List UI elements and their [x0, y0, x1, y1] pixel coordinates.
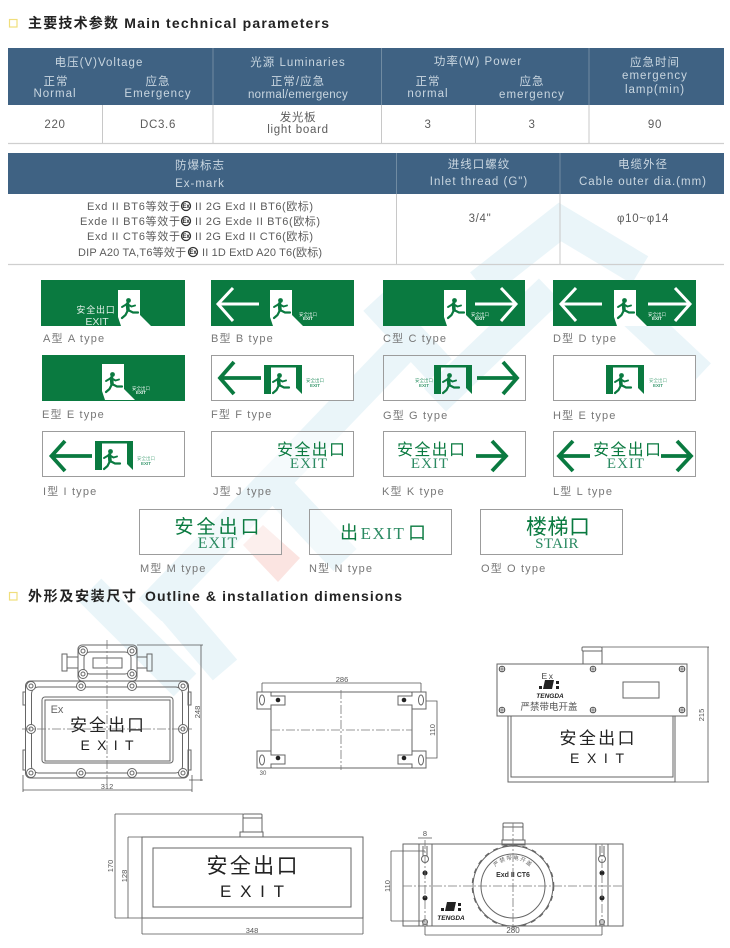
table: explosion-proof parameters: Exd II BT6等效于: [87, 199, 180, 213]
sign: type L: 安全出口: [593, 441, 661, 459]
table: explosion-proof parameters: Exd II CT6等效于: [87, 229, 180, 243]
drawing: side view with terminal cover: 安全出口: [560, 729, 634, 748]
drawing: rear view with round cover: TENGDA: [437, 915, 465, 922]
drawing: side view with terminal cover: EXIT: [570, 750, 624, 766]
sign: type O: [480, 510, 622, 575]
sign: type F: 安全出口: [306, 377, 324, 384]
table: explosion-proof parameters: II 2G Exde II BT6(欧标): [195, 214, 320, 228]
drawing: mounting plate: 30: [260, 771, 267, 777]
drawing: mounting plate: 110: [428, 724, 437, 736]
sign: type B: 安全出口: [299, 311, 317, 318]
table: electrical parameters: emergency: [622, 70, 688, 82]
table: explosion-proof parameters: 进线口螺纹: [448, 157, 510, 171]
table: electrical parameters: Normal: [33, 88, 77, 100]
watermark: [90, 222, 700, 685]
drawing: rear view with round cover: [383, 822, 624, 936]
table: electrical parameters: 正常/应急: [271, 74, 325, 88]
table: electrical parameters: normal: [407, 88, 449, 100]
drawing: front view of sign body: 128: [120, 870, 129, 882]
drawing: rear view with round cover: 280: [506, 926, 520, 935]
sign: type D: EXIT: [652, 316, 662, 321]
table: explosion-proof parameters: II 2G Exd II BT6(欧标): [195, 199, 313, 213]
sign: type C: 安全出口: [471, 311, 489, 318]
drawing: mounting plate: [257, 675, 437, 777]
table: electrical parameters: 90: [648, 119, 662, 131]
sign: type C: EXIT: [475, 316, 485, 321]
sign: type A: 安全出口: [76, 304, 116, 315]
sign: type O: O型 O type: [481, 561, 546, 575]
sign: type H: H型 E type: [553, 408, 617, 422]
sign: type I: EXIT: [141, 461, 151, 466]
table: explosion-proof parameters: [8, 153, 724, 264]
table: electrical parameters: DC3.6: [140, 119, 176, 131]
sign: type A: A型 A type: [43, 331, 105, 345]
sign: type G: 安全出口: [415, 377, 433, 384]
sign: type E: [42, 355, 185, 421]
table: explosion-proof parameters: 防爆标志: [175, 158, 225, 172]
sign: type I: 安全出口: [137, 455, 155, 462]
table: explosion-proof parameters: II 2G Exd II CT6(欧标): [195, 229, 313, 243]
drawing: front view with junction box: 248: [193, 706, 202, 718]
heading: outline and installation dimensions: Outline & installation dimensions: [145, 588, 402, 604]
sign: type E: EXIT: [136, 390, 146, 395]
sign: type L: L型 L type: [553, 484, 613, 498]
drawing: side view with terminal cover: Ex: [542, 671, 554, 681]
table: electrical parameters: 3: [424, 119, 432, 131]
table: electrical parameters: 正常: [416, 75, 440, 88]
drawing: rear view with round cover: 110: [383, 880, 392, 892]
drawing: front view of sign body: EXIT: [220, 882, 284, 901]
drawing: rear view with round cover: 8: [423, 829, 427, 838]
table: electrical parameters: 应急时间: [630, 55, 680, 69]
table: electrical parameters: 光源 Luminaries: [250, 55, 346, 69]
drawing: front view with junction box: [22, 640, 203, 792]
table: explosion-proof parameters: Ex-mark: [175, 178, 225, 190]
sign: type J: J型 J type: [213, 484, 272, 498]
sign: type K: [382, 432, 526, 498]
sign: type O: STAIR: [535, 536, 579, 552]
sign: type K: K型 K type: [382, 484, 445, 498]
sign: type H: [553, 356, 696, 422]
table: electrical parameters: 正常: [44, 75, 68, 88]
table: electrical parameters: 发光板: [280, 110, 316, 124]
sign: type B: [211, 280, 354, 345]
sign: type F: F型 F type: [211, 407, 273, 421]
sign: type M: [140, 510, 282, 575]
table: explosion-proof parameters: 电缆外径: [618, 158, 668, 171]
sign: type I: I型 I type: [43, 484, 97, 498]
sign: type C: [383, 280, 525, 345]
drawing: side view with terminal cover: TENGDA: [536, 693, 564, 700]
drawing: rear view with round cover: 严禁带电开盖: [493, 855, 532, 867]
table: electrical parameters: 3: [528, 119, 536, 131]
table: explosion-proof parameters: Ex: [182, 219, 190, 225]
sign: type C: C型 C type: [383, 331, 447, 345]
sign: type L: EXIT: [607, 456, 645, 472]
sign: type O: 楼梯口: [526, 516, 590, 539]
table: explosion-proof parameters: Ex: [189, 250, 197, 256]
table: electrical parameters: light board: [267, 124, 329, 136]
sign: type A: EXIT: [85, 316, 109, 328]
sign: type J: EXIT: [290, 456, 328, 472]
sign: type I: [42, 432, 184, 498]
drawing: front view with junction box: 安全出口: [70, 716, 144, 735]
sign: type G: G型 G type: [383, 408, 448, 422]
table: explosion-proof parameters: 3/4": [469, 213, 491, 225]
sign: type D: 安全出口: [648, 311, 666, 318]
sign: type N: 口: [408, 523, 426, 543]
drawing: side view with terminal cover: 215: [697, 709, 706, 721]
drawing: front view of sign body: 安全出口: [206, 855, 298, 878]
sign: type D: D型 D type: [553, 331, 617, 345]
drawing: front view of sign body: 348: [246, 926, 258, 935]
sign: type B: B型 B type: [211, 331, 274, 345]
table: explosion-proof parameters: Ex: [182, 234, 190, 240]
table: explosion-proof parameters: II 1D ExtD A20 T6(欧标): [202, 245, 322, 259]
table: explosion-proof parameters: Exde II BT6等效于: [80, 214, 180, 228]
table: explosion-proof parameters: DIP A20 TA,T6等效于: [78, 245, 186, 259]
sign: type K: 安全出口: [397, 441, 465, 459]
drawing: front view of sign body: [106, 814, 363, 935]
sign: type N: EXIT: [361, 524, 405, 543]
drawing: front view with junction box: EXIT: [80, 737, 134, 753]
drawing: mounting plate: 286: [336, 675, 348, 684]
table: electrical parameters: lamp(min): [625, 84, 685, 96]
sign: type B: EXIT: [303, 316, 313, 321]
drawing: side view with terminal cover: [497, 647, 709, 782]
sign: type N: 出: [340, 523, 358, 543]
sign: type N: N型 N type: [309, 561, 373, 575]
heading: outline and installation dimensions: [10, 588, 402, 604]
table: electrical parameters: 应急: [520, 74, 544, 88]
table: explosion-proof parameters: Cable outer dia.(mm): [579, 176, 707, 188]
sign: type K: EXIT: [411, 456, 449, 472]
sign: type J: 安全出口: [277, 441, 345, 459]
table: electrical parameters: Emergency: [124, 88, 192, 100]
table: electrical parameters: 应急: [146, 74, 170, 88]
heading: main technical parameters: 主要技术参数 Main technical parameters: [28, 15, 329, 31]
table: explosion-proof parameters: φ10~φ14: [617, 213, 669, 225]
drawing: front view of sign body: 170: [106, 860, 115, 872]
table: electrical parameters: emergency: [499, 89, 565, 101]
drawing: side view with terminal cover: 严禁带电开盖: [520, 701, 578, 713]
drawing: front view with junction box: Ex: [51, 704, 64, 716]
table: electrical parameters: 功率(W) Power: [434, 54, 522, 68]
sign: type N: [309, 510, 452, 575]
table: explosion-proof parameters: Inlet thread (G"): [430, 176, 528, 188]
table: electrical parameters: 220: [44, 119, 66, 131]
sign: type M: M型 M type: [140, 561, 207, 575]
sign: type G: [383, 356, 526, 422]
sign: type J: [212, 432, 354, 498]
table: electrical parameters: normal/emergency: [248, 89, 348, 101]
table: electrical parameters: [8, 48, 724, 144]
table: electrical parameters: 电压(V)Voltage: [55, 56, 143, 69]
drawing: front view with junction box: 312: [101, 782, 113, 791]
sign: type L: [553, 432, 696, 498]
table: explosion-proof parameters: Ex: [182, 204, 190, 210]
sign: type M: 安全出口: [174, 516, 260, 538]
heading: outline and installation dimensions: 外形及安装尺寸: [28, 588, 136, 604]
sign: type F: EXIT: [310, 383, 320, 388]
sign: type H: EXIT: [653, 383, 663, 388]
sign: type M: EXIT: [198, 535, 238, 552]
drawing: rear view with round cover: Exd II CT6: [496, 872, 530, 879]
sign: type E: E型 E type: [42, 407, 105, 421]
sign: type F: [211, 356, 354, 421]
sign: type A: [41, 280, 185, 345]
sign: type H: 安全出口: [649, 377, 667, 384]
sign: type D: [553, 280, 696, 345]
sign: type G: EXIT: [419, 383, 429, 388]
sign: type E: 安全出口: [132, 385, 150, 392]
